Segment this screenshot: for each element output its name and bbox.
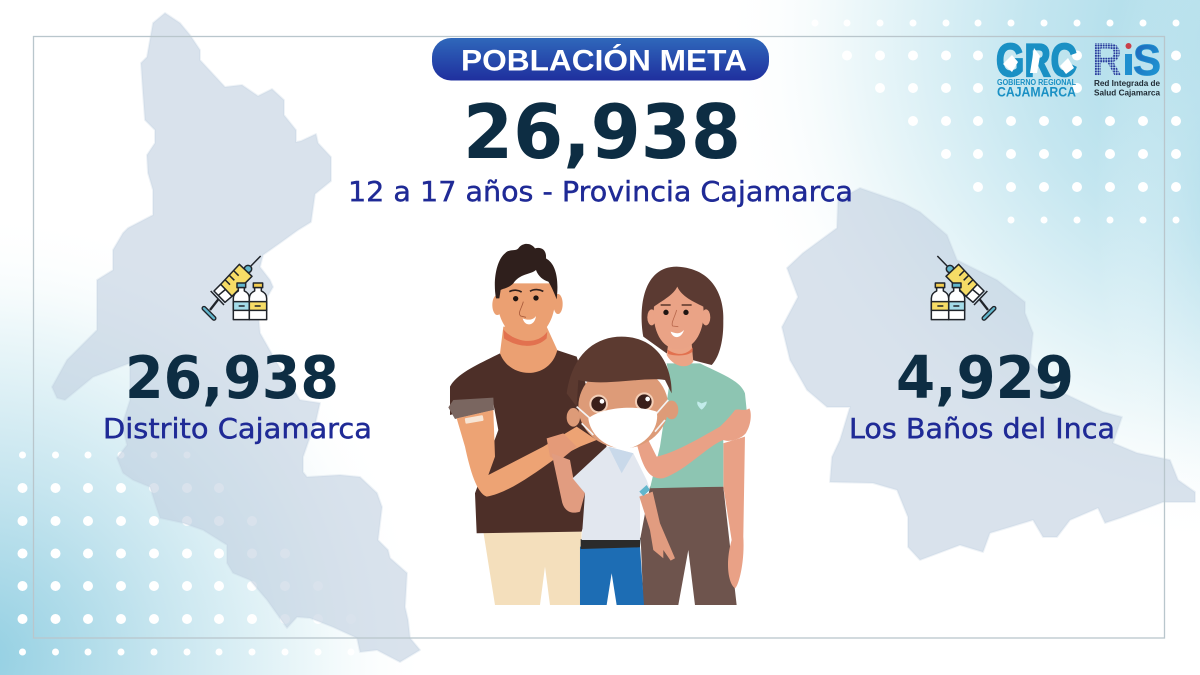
dot pattern: top right [812, 20, 1181, 224]
dot pattern: bottom left [18, 452, 356, 656]
title pill [432, 38, 769, 80]
logo: Gobierno Regional Cajamarca [996, 34, 1077, 100]
logo: Gobierno Regional Cajamarca: GOBIERNO REGIONAL [997, 78, 1076, 87]
icon: vaccine left [204, 256, 267, 320]
map: Los Baños del Inca silhouette [782, 188, 1195, 560]
icon: vaccine right [931, 256, 994, 320]
logo: Red Integrada de Salud Cajamarca: S [1133, 36, 1161, 85]
title pill: POBLACIÓN META [461, 44, 747, 78]
map: Distrito Cajamarca silhouette [52, 13, 420, 662]
boy [552, 337, 678, 605]
right stat label: Los Baños del Inca [849, 413, 1115, 445]
main number: 26,938 [463, 88, 741, 176]
logo: Red Integrada de Salud Cajamarca: Salud Cajamarca [1094, 88, 1161, 98]
subtitle: 12 a 17 años - Provincia Cajamarca [348, 175, 853, 208]
right stat number: 4,929 [896, 343, 1074, 412]
left stat label: Distrito Cajamarca [103, 413, 372, 445]
man [448, 244, 607, 605]
logo: Gobierno Regional Cajamarca: CAJAMARCA [997, 84, 1076, 100]
logo: Red Integrada de Salud Cajamarca: Red Integrada de [1094, 79, 1161, 88]
logo: Gobierno Regional Cajamarca: GRC [996, 34, 1077, 86]
left stat number: 26,938 [125, 343, 339, 412]
logo: Red Integrada de Salud Cajamarca: R [1092, 33, 1122, 85]
logo: Red Integrada de Salud Cajamarca [1092, 33, 1161, 98]
illustration: family with masked child [448, 244, 751, 605]
woman [637, 267, 751, 605]
